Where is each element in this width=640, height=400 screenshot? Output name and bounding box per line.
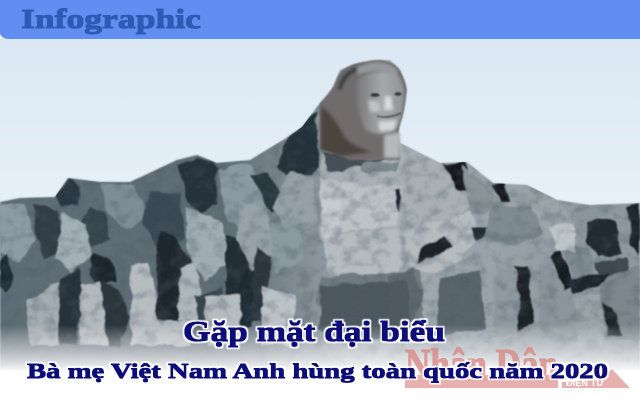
dark hairline [340,66,366,88]
statue silhouette [0,60,640,370]
central torso planes [316,142,556,342]
header band [0,0,640,39]
title line 2: Bà mẹ Việt Nam Anh hùng toàn quốc năm 2020 [27,359,608,383]
chin highlight [378,120,397,131]
statue of the Vietnamese Heroic Mother [0,60,640,370]
right eye [394,92,402,96]
grey top hair [356,62,398,76]
nose highlight [384,96,393,110]
right wing rock facets [390,200,640,345]
mouth [377,113,401,117]
rock texture shadows [0,60,640,360]
cheek highlight [368,100,380,112]
watermark small text: ĐIỆN TỬ [566,377,605,388]
watermark red block [405,369,630,388]
face [356,71,404,134]
watermark wordmark: Nhân Dân [405,339,558,390]
left wing rock facets [0,112,320,345]
header label: Infographic [21,4,201,34]
header background [0,0,640,39]
bottom white fade [0,325,640,400]
head mass and hair [320,60,407,160]
brown hair at the neck [321,106,372,156]
neck [384,132,400,158]
head of the statue [320,60,407,160]
title line 1: Gặp mặt đại biểu [183,317,445,348]
watermark: Nhân Dân [405,339,630,390]
left eye [370,93,380,97]
